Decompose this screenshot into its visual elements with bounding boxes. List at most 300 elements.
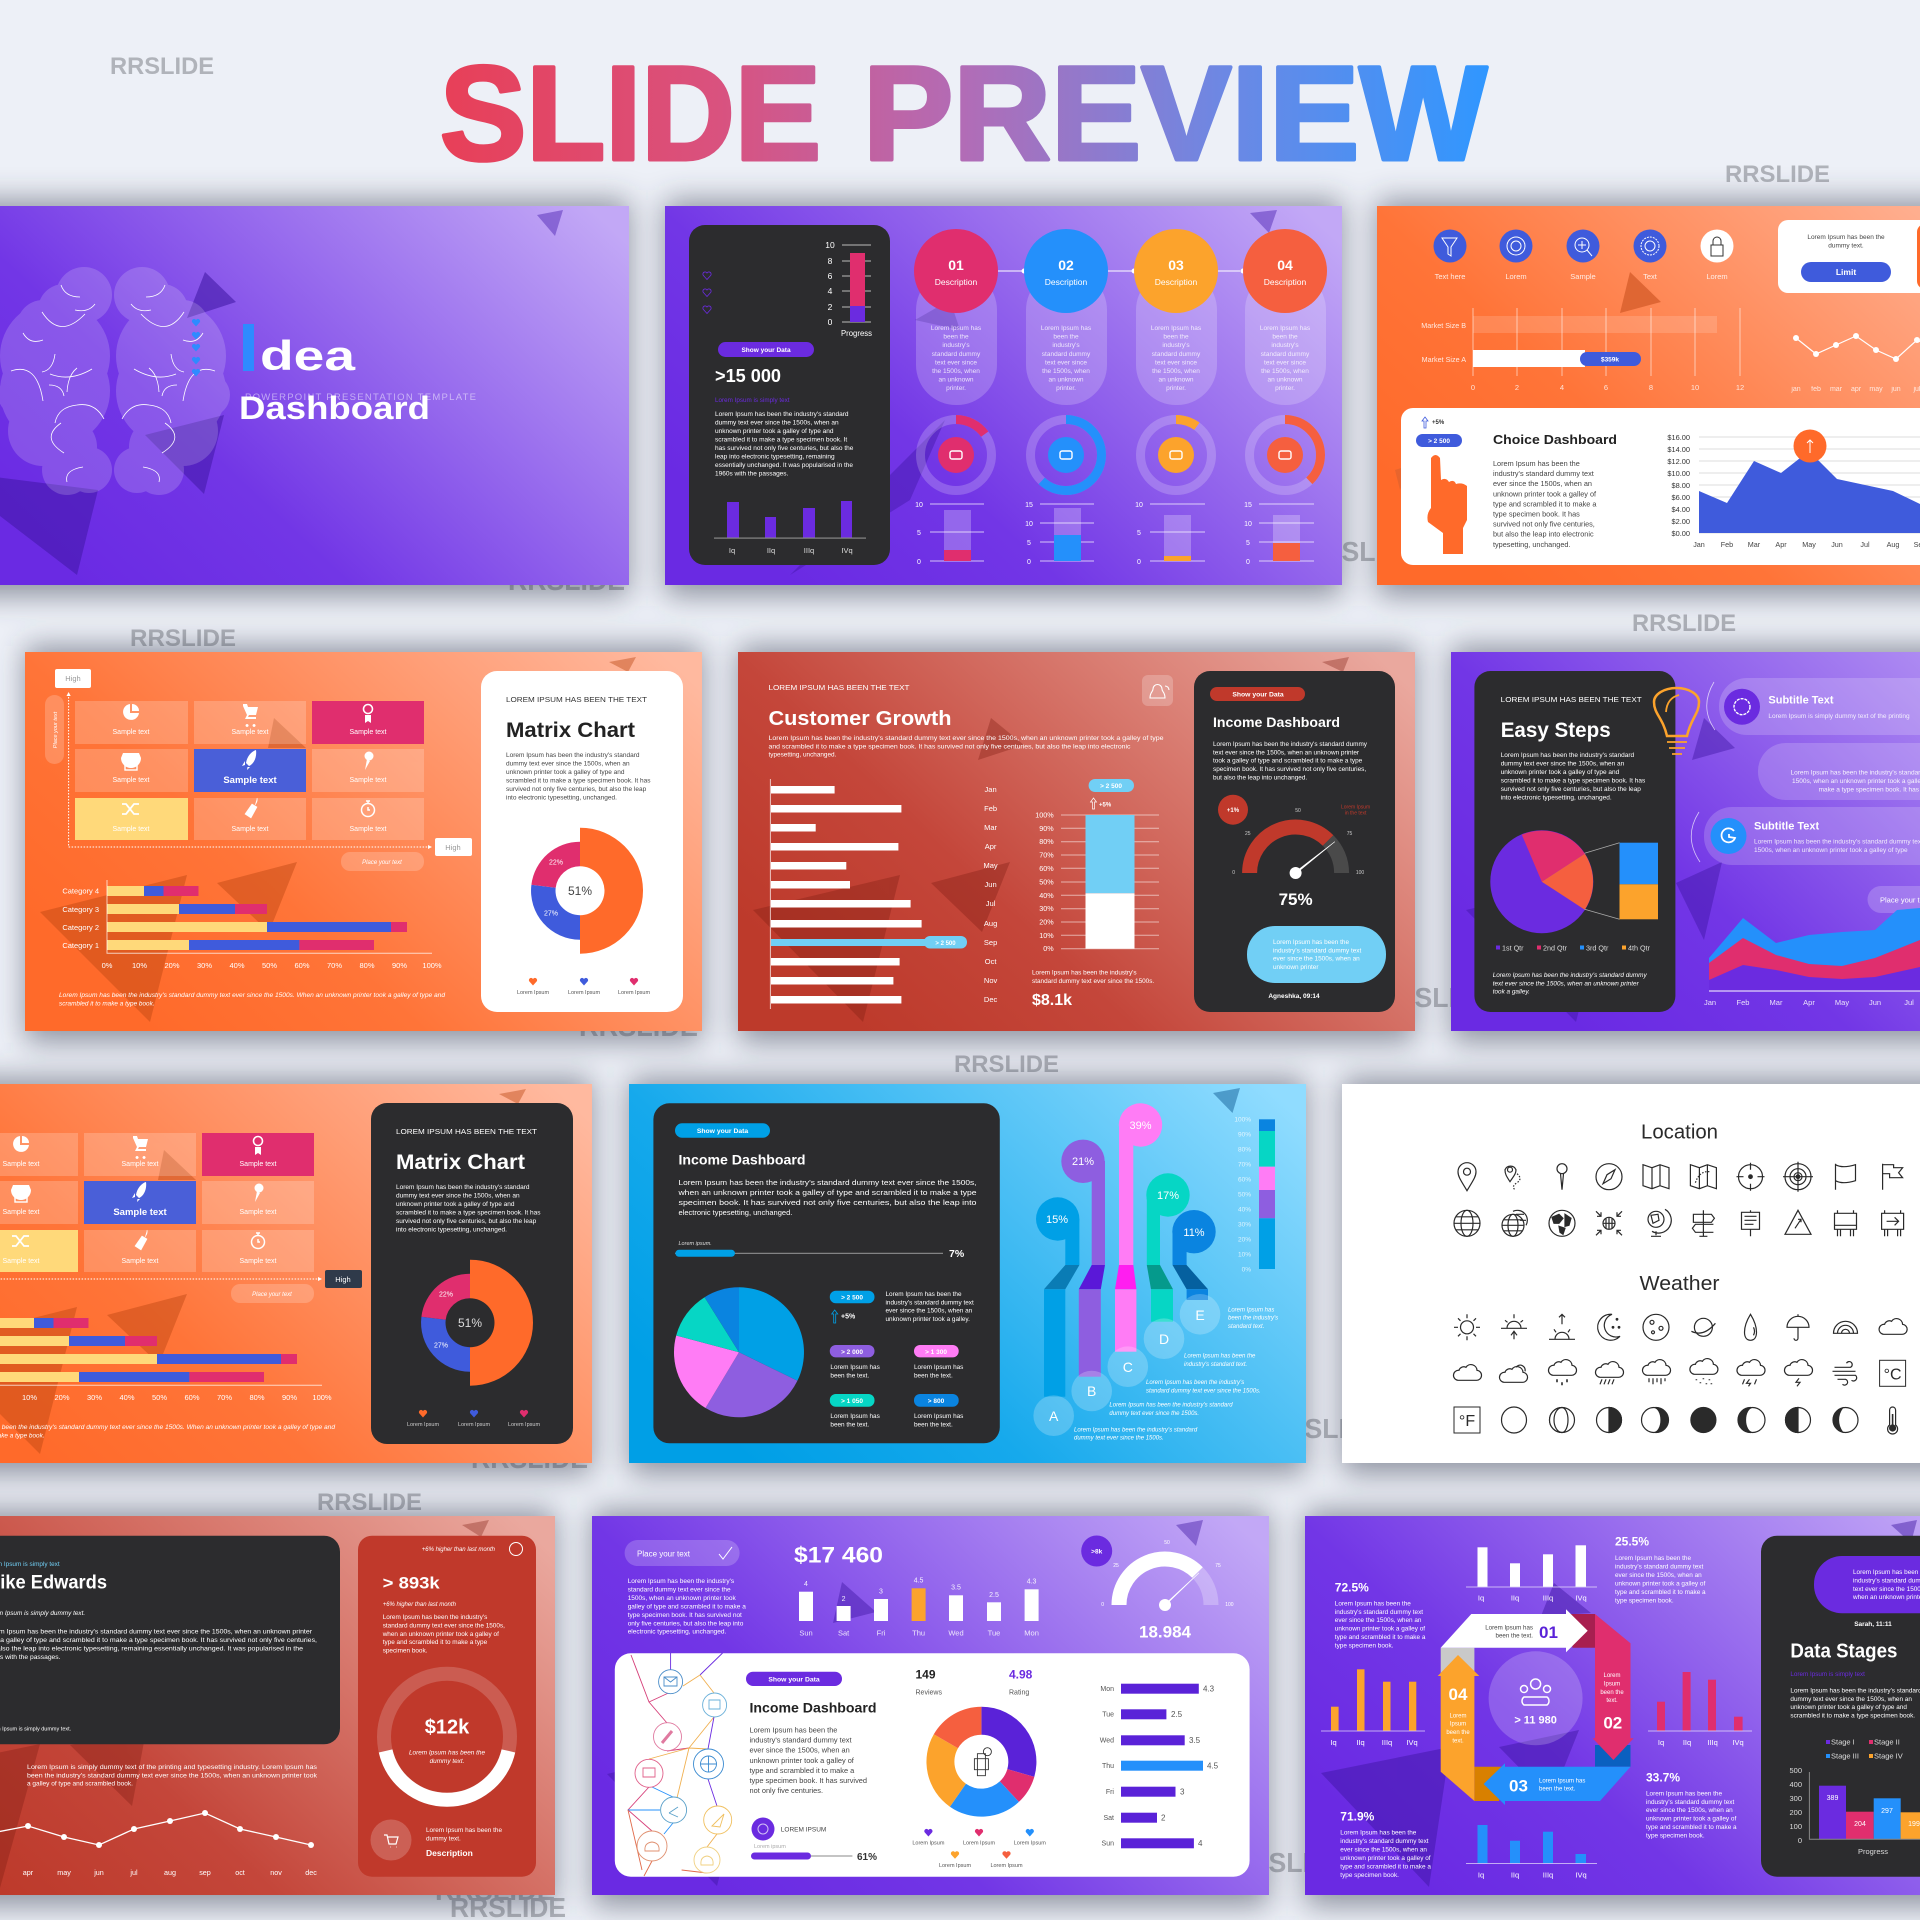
progress chart: Progress (841, 328, 872, 338)
paragraph: dummy text ever since the 1500s, when an (715, 420, 839, 426)
arrow 03: been the text. (1539, 1787, 1576, 1793)
stat pills: Lorem Ipsum has (914, 1413, 963, 1420)
area chart: Jun (1869, 998, 1881, 1007)
stat 72.5%: Lorem Ipsum has been the (1335, 1600, 1411, 1607)
paragraph: typesetting, unchanged. (1493, 540, 1570, 549)
stat pills: Lorem Ipsum has been the (886, 1291, 962, 1298)
pill: show your data (746, 1672, 842, 1686)
legend: Lorem Ipsum (407, 1422, 439, 1428)
stacked bar chart: Category 2 (62, 923, 99, 932)
panel: income dashboard: specimen book. It has survived not only five centuries, (1213, 766, 1366, 773)
card: matrix chart (481, 671, 683, 1012)
legend: Lorem Ipsum (963, 1840, 995, 1846)
panel: data stages: Data Stages (1790, 1641, 1897, 1663)
balloon C 39%: 39% (1129, 1120, 1152, 1132)
stat 72.5%: type and scrambled it to make a (1335, 1634, 1426, 1641)
card: limit: dummy text. (1828, 243, 1864, 250)
area chart: Apr (1803, 998, 1815, 1007)
horizontal bar chart: Mar (984, 823, 998, 832)
gauge: 50 (1164, 1540, 1170, 1546)
italic note: Lorem Ipsum has been the industry's standard dummy text ever since the 1500s. When an unknown printer took a galley of type and (59, 992, 445, 999)
panel: matrix chart dark: unknown printer took a galley of type and (396, 1201, 515, 1208)
icon: blue step (1710, 818, 1746, 854)
horizontal bar chart: Dec (984, 995, 998, 1004)
column 03: 5 (1137, 530, 1141, 537)
stat 25.5%: type specimen book. (1615, 1597, 1674, 1604)
grid labels: Sample text (350, 729, 387, 736)
column 01: an unknown (938, 377, 974, 384)
balloon E 11%: E (1195, 1307, 1205, 1323)
watermarks: RRSLIDE (110, 53, 214, 80)
weather icons (1453, 1314, 1907, 1434)
panel: red stats: Lorem Ipsum has been the (426, 1827, 502, 1834)
column 02: the 1500s, when (1042, 368, 1090, 375)
progress chart: 4 (828, 286, 833, 296)
stacked bar chart: 60% (184, 1393, 200, 1402)
column 01: 5 (917, 530, 921, 537)
panel: slide 4 matrix chart light (25, 652, 702, 1031)
grid labels: Sample text (122, 1161, 159, 1168)
panel: income dashboard: took a galley of type and scrambled it to make a type (1213, 758, 1363, 765)
icon row: Text here (1435, 272, 1465, 281)
column 01: the 1500s, when (932, 368, 980, 375)
progress bars (1789, 1766, 1920, 1856)
panel: income dashboard: electronic typesetting, unchanged. (678, 1208, 792, 1217)
panel: red stats: standard dummy text ever since the 1500s, (383, 1622, 505, 1629)
column 03: Description (1155, 277, 1198, 287)
center circle: > 11 980 (1514, 1714, 1557, 1726)
bar chart orange (1321, 1669, 1425, 1747)
panel: matrix chart dark: scrambled it to make a type specimen book. It has (396, 1209, 541, 1216)
panel: easy steps: Easy Steps (1501, 719, 1611, 742)
horizontal bars: Thu (1102, 1763, 1114, 1770)
legend: Lorem Ipsum (618, 990, 650, 996)
progress bars: 200 (1789, 1808, 1802, 1817)
stacked bar chart: 90% (282, 1393, 297, 1402)
line chart (0, 1810, 317, 1877)
market size bar chart: 0 (1471, 383, 1475, 392)
axes (45, 669, 472, 871)
column 04: standard dummy (1261, 351, 1310, 358)
subtitle: Lorem Ipsum is simply text (715, 397, 790, 404)
stat pills (830, 1291, 974, 1428)
bar chart magenta: Iq (1658, 1738, 1664, 1747)
column 02: 15 (1025, 502, 1033, 509)
market size bar chart: 8 (1649, 383, 1653, 392)
line chart: jun (93, 1868, 104, 1877)
icon: brain (0, 267, 230, 495)
watermarks: RRSLIDE (954, 1051, 1059, 1078)
line chart: jan (1790, 386, 1801, 393)
horizontal bar chart: Jun (985, 880, 997, 889)
heading: Income Dashboard (750, 1700, 876, 1715)
progress: LOREM IPSUM (781, 1826, 826, 1834)
paragraph: 1500s, when an unknown printer took (628, 1595, 736, 1602)
stat pills: Lorem Ipsum has (830, 1413, 880, 1420)
axes: Place your text (362, 860, 402, 866)
badge: > 2 500 (1428, 438, 1450, 445)
panel: slide 3 choice dashboard (1377, 206, 1920, 585)
panel: income dashboard: specimen book. It has survived not only five centuries, but also the leap into (678, 1198, 976, 1207)
panel: income dashboard: when an unknown printer took a galley of type and scrambled it to make a type (677, 1188, 977, 1197)
horizontal bars: Fri (1106, 1789, 1114, 1796)
badge (1416, 417, 1462, 447)
balloon B 21% (1061, 1140, 1112, 1411)
watermarks: RRSLIDE (508, 565, 625, 596)
stacked percent column: 20% (1238, 1236, 1251, 1244)
panel: red stats: Description (426, 1848, 473, 1858)
stacked percent column: 50% (1238, 1192, 1251, 1198)
percent column chart: 80% (1039, 837, 1054, 846)
grid labels: Sample text (3, 1209, 40, 1216)
column 03: standard dummy (1152, 351, 1201, 358)
grid labels: Sample text (240, 1161, 277, 1168)
panel: income dashboard: Lorem Ipsum has been the industry's standard dummy (1213, 741, 1368, 748)
progress chart: 8 (828, 256, 833, 266)
panel: income dashboard: Income Dashboard (1213, 715, 1340, 730)
pills: make a type specimen book. It has (1819, 786, 1920, 793)
gauge ring: $12k (425, 1716, 470, 1738)
grid labels: Sample text (122, 1258, 159, 1265)
balloon B 21%: 21% (1072, 1156, 1094, 1168)
connector lines (998, 269, 1245, 273)
horizontal bars: 4.3 (1203, 1684, 1215, 1694)
panel: red stats (358, 1536, 536, 1877)
stat 33.7%: unknown printer took a galley of (1646, 1816, 1736, 1823)
stacked bar chart: 20% (164, 961, 180, 970)
horizontal bar chart: Jul (986, 899, 996, 908)
panel: slide 11 income dashboard white (592, 1516, 1269, 1895)
stat 25.5%: industry's standard dummy text (1615, 1563, 1703, 1570)
progress chart: 10 (825, 240, 835, 250)
column 01: Description (935, 277, 978, 287)
arrow 01: been the text. (1496, 1633, 1533, 1640)
panel: red stats: specimen book. (383, 1648, 428, 1655)
center circle (1489, 1651, 1583, 1745)
area chart: $12.00 (1667, 457, 1690, 466)
progress: Lorem ipsum. (678, 1241, 712, 1247)
watermarks: RRSLIDE (1376, 982, 1493, 1013)
stacked bar chart: 100% (422, 961, 442, 970)
column 02: 5 (1027, 540, 1031, 547)
column 02: been the (1053, 334, 1079, 341)
icon: users (1142, 675, 1173, 706)
heading: Choice Dashboard (1493, 432, 1617, 447)
column 01: 10 (915, 502, 923, 509)
stat pills: > 800 (928, 1398, 945, 1405)
balloon captions: Lorem Ipsum has (1228, 1307, 1274, 1313)
stats: Rating (1009, 1690, 1029, 1696)
heading: idea (243, 324, 356, 371)
legend: 1st Qtr (1502, 944, 1524, 952)
stacked percent column: 70% (1238, 1162, 1251, 1168)
arrow 02: been the (1600, 1690, 1624, 1696)
balloon D 17%: 17% (1157, 1190, 1179, 1202)
donut chart (926, 1707, 1036, 1817)
watermarks: RRSLIDE (579, 1011, 698, 1042)
paragraph: unknown printer took a galley of (750, 1756, 855, 1765)
bar chart white: IIq (1511, 1594, 1519, 1602)
paragraph: been the industry's standard dummy text ever since the 1500s, when an unknown printer took (27, 1772, 318, 1779)
bar chart magenta: IVq (1732, 1738, 1744, 1747)
legend: 4th Qtr (1628, 944, 1651, 952)
progress bars: 389 (1827, 1795, 1838, 1802)
stat pills: been the text. (914, 1372, 953, 1379)
column 03: the 1500s, when (1152, 368, 1200, 375)
panel: red stats: type and scrambled it to make a type (383, 1639, 488, 1646)
legend: 3rd Qtr (1586, 944, 1609, 952)
legend: Lorem Ipsum (1014, 1840, 1046, 1846)
grid labels (113, 729, 387, 833)
market size bar chart: Market Size A (1422, 355, 1466, 364)
watermarks: RRSLIDE (317, 1489, 422, 1516)
paragraph: type specimen book. It has survived not (628, 1612, 742, 1619)
percent column chart: 0% (1043, 944, 1054, 953)
column 01: 01 (948, 257, 964, 273)
panel: matrix chart dark: Lorem Ipsum has been the industry's standard (396, 1184, 530, 1191)
arrow 02: 02 (1603, 1713, 1622, 1732)
arrow 04 (1438, 1655, 1479, 1801)
panel: matrix chart dark: Matrix Chart (396, 1151, 525, 1174)
matrix grid (0, 1133, 314, 1272)
column 04: 0 (1246, 559, 1250, 566)
panel: easy steps: scrambled it to make a type specimen book. It has (1501, 777, 1646, 784)
heading block (768, 683, 1164, 759)
legend: 2nd Qtr (1543, 944, 1568, 952)
arrow 04: text. (1452, 1738, 1464, 1744)
legend: Lorem Ipsum (508, 1422, 540, 1428)
paragraph: unknown printer took a galley of (1493, 489, 1597, 498)
pills: 1500s, when an unknown printer took a galley of type (1754, 847, 1908, 854)
percent column chart (1035, 779, 1159, 953)
progress bars: 204 (1854, 1821, 1866, 1828)
percent column chart: 40% (1039, 891, 1054, 900)
panel: income dashboard: Agneshka, 09:14 (1268, 993, 1320, 1000)
market size bar chart: 4 (1560, 383, 1564, 392)
horizontal bars: 2 (1161, 1814, 1166, 1822)
bubble (1247, 926, 1386, 983)
paragraph: type and scrambled it to make a (750, 1766, 855, 1775)
quarterly bars: IVq (841, 546, 853, 555)
bar chart magenta (1648, 1672, 1752, 1747)
paragraph: industry's standard dummy text (750, 1736, 852, 1745)
watermarks: RRSLIDE (1266, 1413, 1383, 1444)
panel: easy steps: Lorem Ipsum has been the industry's standard (1501, 752, 1635, 759)
donut chart: 22% (439, 1292, 453, 1299)
area chart: May (1835, 998, 1849, 1007)
gauge: 0 (1232, 870, 1235, 876)
balloon captions: standard dummy text ever since the 1500s. (1146, 1388, 1261, 1394)
gauge: 25 (1113, 1563, 1119, 1569)
stat 71.9%: unknown printer took a galley of (1340, 1855, 1431, 1862)
stacked bar chart: 60% (294, 961, 310, 970)
legend: Stage III (1831, 1752, 1859, 1760)
weekly bars: Sun (799, 1628, 813, 1638)
pill: show your data (718, 342, 814, 357)
axes: High (65, 674, 81, 683)
pills: Subtitle Text (1768, 694, 1834, 706)
column 04 (1243, 229, 1327, 566)
stacked bar chart: 70% (327, 961, 342, 970)
stacked bar chart: 30% (197, 961, 212, 970)
pill: show your data: Show your Data (741, 347, 791, 354)
grid labels: Sample text (350, 826, 387, 833)
area chart (1704, 908, 1920, 1007)
pill: show your data: Show your Data (768, 1676, 820, 1683)
percent column chart: 60% (1039, 864, 1054, 873)
axes: Place your text (53, 711, 59, 748)
italic note: scrambled it to make a type book. (59, 1000, 155, 1007)
stacked bar chart: 10% (132, 961, 147, 970)
gauge: 18.984 (1139, 1623, 1192, 1642)
bar chart white: IVq (1575, 1594, 1587, 1602)
column 01 (914, 229, 998, 566)
balloon E 11% (1172, 1210, 1220, 1335)
legend: Lorem Ipsum (568, 990, 600, 996)
weekly bars: Mon (1024, 1628, 1039, 1638)
legend (1826, 1738, 1903, 1760)
panel: matrix chart dark: into electronic typesetting, unchanged. (396, 1226, 507, 1233)
panel: red stats: > 893k (383, 1573, 440, 1592)
icon: lightbulb (1654, 688, 1699, 754)
stat 33.7%: Lorem Ipsum has been the (1646, 1790, 1722, 1797)
progress bars: 0 (1798, 1836, 1802, 1845)
market size bar chart: 10 (1691, 383, 1699, 392)
card: matrix chart: Lorem Ipsum has been the industry's standard (506, 752, 640, 759)
pills: Lorem Ipsum has been the industry's standard dummy text (1754, 838, 1920, 846)
market size bar chart: 12 (1736, 383, 1744, 392)
stacked bar chart: 10% (22, 1393, 37, 1402)
stacked bar chart: 80% (249, 1393, 265, 1402)
column 02: 10 (1025, 521, 1033, 528)
icon row: Lorem (1505, 272, 1527, 281)
column 04: an unknown (1267, 377, 1303, 384)
gauge: 50 (1295, 808, 1301, 814)
area chart: Feb (1737, 998, 1749, 1007)
axes: High (335, 1275, 351, 1284)
horizontal bar chart: Sep (984, 938, 997, 947)
stacked bar chart: 100% (312, 1393, 332, 1402)
heading: weather: Weather (1640, 1273, 1720, 1295)
column 02 (1024, 229, 1108, 566)
paragraph: ever since the 1500s, when an (1493, 479, 1592, 488)
panel: matrix chart dark: survived not only five centuries, but also the leap (396, 1218, 537, 1225)
area chart: Jan (1704, 998, 1716, 1007)
area chart: $4.00 (1672, 505, 1690, 514)
arrow 01: 01 (1539, 1623, 1558, 1642)
donut chart (531, 828, 643, 954)
weekly bars: Fri (877, 1628, 886, 1638)
grid labels: Sample text (113, 1207, 167, 1218)
gauge: 75% (1279, 890, 1313, 909)
horizontal bar chart: Nov (984, 976, 998, 985)
paragraph: industry's standard dummy text (1493, 469, 1594, 478)
stat pills: +5% (841, 1314, 856, 1320)
paragraph: standard dummy text ever since the (628, 1586, 731, 1593)
cycle diagram (1438, 1609, 1634, 1805)
column 03: been the (1163, 334, 1189, 341)
market size bar chart: 2 (1515, 383, 1519, 392)
line chart: jun (1890, 386, 1901, 393)
arrow 02 (1593, 1614, 1634, 1760)
column 02: printer. (1056, 385, 1076, 392)
column 03: 10 (1135, 502, 1143, 509)
icon: hand (1427, 455, 1467, 554)
donut chart: 51% (458, 1316, 482, 1330)
subtitle: POWERPOINT PRESENTATION TEMPLATE (245, 392, 476, 403)
paragraph: Lorem Ipsum has been the (1493, 459, 1580, 468)
legend (407, 1410, 540, 1428)
column 04: 5 (1246, 540, 1250, 547)
area chart: Jul (1860, 540, 1870, 549)
balloon captions: Lorem Ipsum has been the industry's standard (1074, 1427, 1198, 1433)
network diagram (628, 1653, 732, 1876)
gauge: in the text (1345, 810, 1367, 816)
panel: slide 9 location and weather icons (1342, 1084, 1920, 1463)
panel: slide 7 matrix chart dark (0, 1084, 592, 1463)
column 03: 0 (1137, 559, 1141, 566)
axes: Place your text (252, 1292, 292, 1298)
donut chart: 22% (549, 860, 563, 867)
stat 72.5%: ever since the 1500s, when an (1335, 1617, 1422, 1624)
location icons (1454, 1162, 1904, 1236)
panel: income dashboard: Show your Data (697, 1128, 748, 1135)
area chart: Feb (1721, 540, 1733, 549)
stacked bar chart: 0% (102, 961, 113, 970)
progress chart: 0 (828, 317, 833, 327)
watermarks: RRSLIDE (471, 1443, 588, 1474)
heading block: Lorem Ipsum has been the industry's standard dummy text ever since the 1500s, when an unknown printer took a galley of type (768, 735, 1164, 742)
progress (675, 1241, 965, 1260)
percent column chart: +5% (1099, 802, 1112, 808)
horizontal bar chart: Aug (984, 919, 997, 928)
paragraph: survived not only five centuries, (1493, 520, 1595, 529)
line chart: aug (164, 1868, 176, 1877)
pill: place your text: Place your text (637, 1550, 691, 1558)
balloon captions: dummy text ever since the 1500s. (1109, 1411, 1199, 1417)
balloon captions: Lorem Ipsum has been the industry's (1146, 1380, 1244, 1386)
horizontal bar chart: May (984, 861, 998, 870)
panel: slide 10 mike edwards (0, 1516, 555, 1895)
panel: matrix chart dark: dummy text ever since the 1500s, when an (396, 1192, 520, 1199)
panel: profile (0, 1536, 340, 1744)
legend: Stage I (1831, 1738, 1855, 1746)
area chart: Mar (1770, 998, 1783, 1007)
stat 72.5%: unknown printer took a galley of (1335, 1626, 1425, 1633)
horizontal bars: Sun (1102, 1840, 1114, 1848)
market size bar chart: Market Size B (1421, 321, 1466, 330)
weekly bars (799, 1577, 1039, 1638)
card: matrix chart: survived not only five centuries, but also the leap (506, 786, 647, 793)
stat pills: been the text. (830, 1421, 869, 1428)
column 04: the 1500s, when (1261, 368, 1309, 375)
column 01: Lorem Ipsum has (931, 325, 982, 332)
card: limit: Limit (1836, 267, 1856, 277)
donut chart (421, 1260, 533, 1386)
line chart: may (57, 1868, 71, 1877)
stat 33.7%: type specimen book. (1646, 1833, 1705, 1840)
stacked bar chart (0, 1318, 332, 1402)
panel: easy steps: survived not only five centuries, but also the leap (1501, 786, 1641, 793)
horizontal bars: 4 (1198, 1839, 1203, 1848)
line chart: oct (235, 1868, 245, 1877)
arrow 02: Ipsum (1604, 1681, 1620, 1687)
panel: data stages (1761, 1536, 1920, 1877)
card: matrix chart: LOREM IPSUM HAS BEEN THE TEXT (506, 695, 648, 704)
arrow 03 (1484, 1763, 1630, 1805)
watermarks: RRSLIDE (1230, 1847, 1347, 1878)
progress chart (825, 240, 872, 338)
